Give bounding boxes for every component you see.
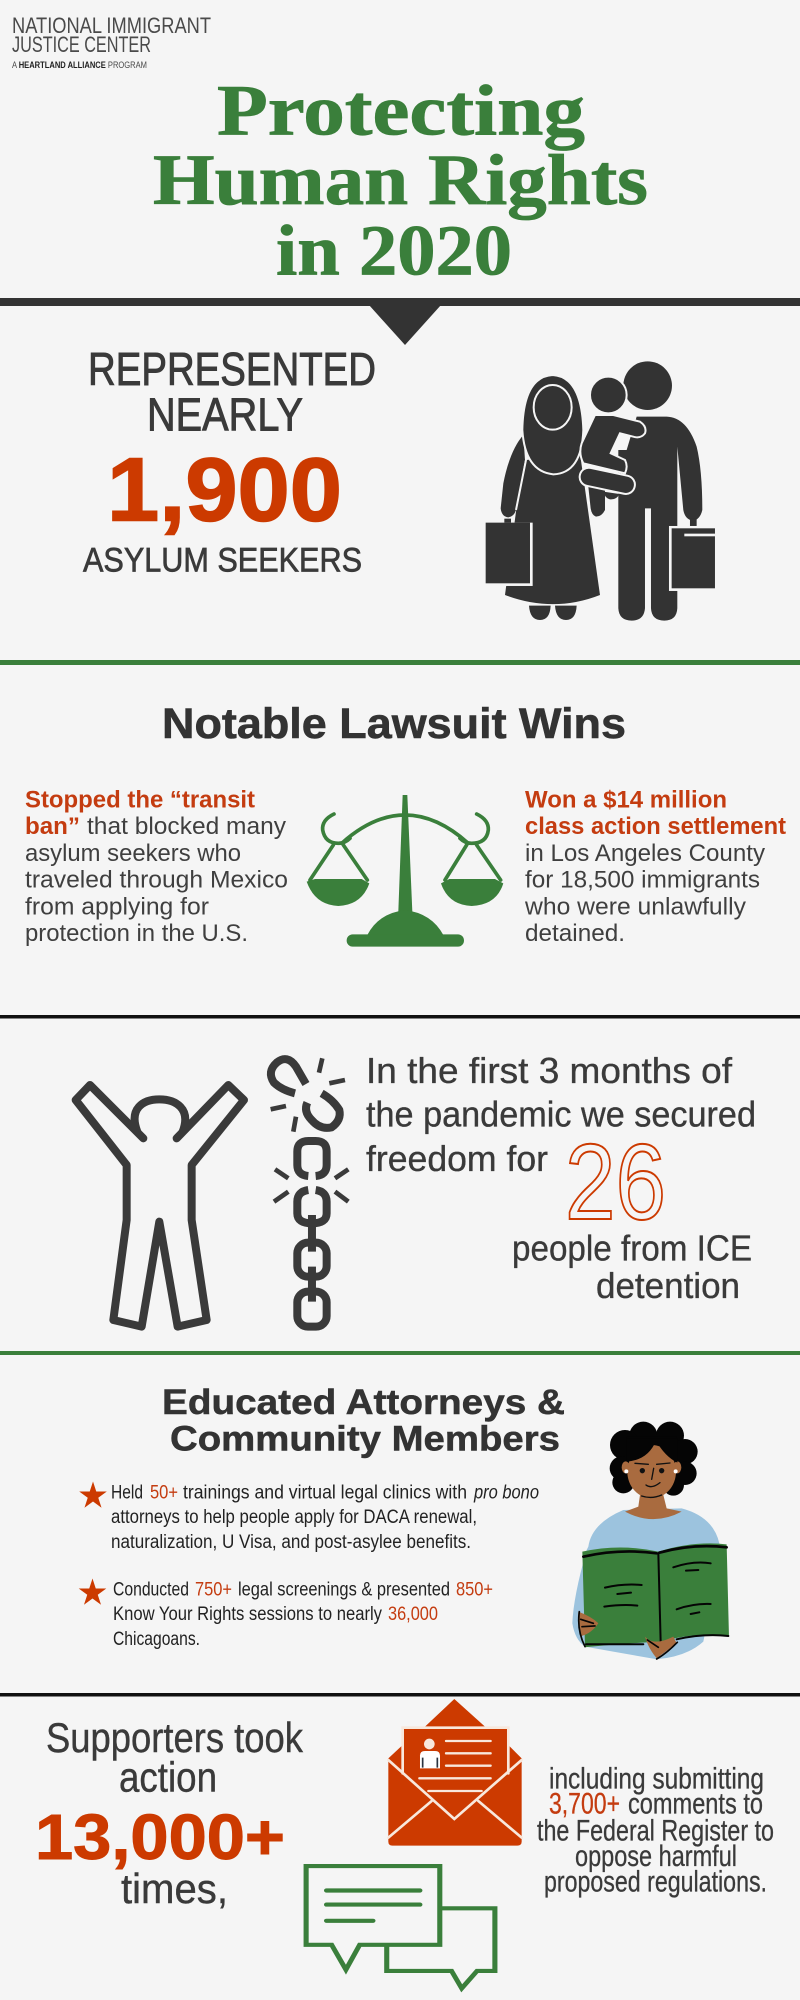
text block: class action settlement: detained. [525,920,625,947]
title: Human Rights [153,140,648,220]
text block: class action settlement: who were unlawfully [524,894,746,920]
icon: scales of justice [307,795,503,947]
text block: transit ban: Stopped the “transit [25,786,255,813]
stat text: 1,900 asylum seekers: 1,900 [107,441,342,541]
green divider [0,660,800,665]
icon: refugee family with bags [486,361,716,621]
text block: class action settlement [524,786,786,947]
icon: star bullet [79,1578,106,1605]
text block: federal register comments: comments to [628,1787,763,1820]
heading: educated attorneys and community members: Educated Attorneys & [162,1383,565,1422]
text block: federal register comments: oppose harmful [575,1840,737,1873]
logo: National Immigrant Justice Center: JUSTICE CENTER [12,32,151,57]
title: in 2020 [276,210,512,290]
text block: transit ban: that blocked many [87,813,286,840]
bullet: trainings: 50+ [150,1482,178,1503]
heading: educated attorneys and community members [162,1383,565,1459]
panel: educated attorneys and community [79,1383,729,1659]
icon: person with raised arms [76,1085,244,1327]
illustration: woman reading a book [572,1422,729,1659]
black divider [0,1693,800,1696]
text block: transit ban: traveled through Mexico [25,867,288,894]
text block: federal register comments [537,1762,774,1899]
text block: transit ban: from applying for [25,894,209,920]
bullet: trainings: pro bono [473,1482,539,1503]
stat text: freedom for 26 people [366,1050,756,1306]
stat text: freedom for 26 people: people from ICE [512,1227,752,1268]
stat text: 1,900 asylum seekers [83,343,376,580]
bullet: trainings: Held [111,1482,143,1503]
panel: ICE detention release [76,1050,756,1327]
icon: star bullet [79,1482,107,1508]
title [153,71,648,290]
logo: National Immigrant Justice Center [12,13,211,71]
bullet: trainings [79,1482,539,1553]
text block: transit ban: ban” [25,813,80,840]
panel: notable lawsuit wins [25,700,786,947]
stat text: 13,000+ actions [35,1714,304,1912]
logo: National Immigrant Justice Center: A HEARTLAND ALLIANCE PROGRAM [12,60,147,71]
logo: National Immigrant Justice Center: NATIONAL IMMIGRANT [12,13,211,38]
bullet: legal screenings: Conducted [113,1579,189,1600]
bullet: legal screenings [79,1578,493,1650]
text block: transit ban: protection in the U.S. [25,920,248,947]
stat text: 1,900 asylum seekers: ASYLUM SEEKERS [83,542,362,580]
green divider [0,1351,800,1355]
bullet: legal screenings: legal screenings & presented [238,1579,450,1600]
panel: supporters took action [35,1699,774,1988]
stat text: freedom for 26 people: detention [596,1265,740,1306]
bullet: legal screenings: 36,000 [388,1604,438,1625]
bullet: legal screenings: Chicagoans. [113,1629,200,1650]
bullet: legal screenings: 750+ [195,1579,232,1600]
bullet: trainings: attorneys to help people apply for DACA renewal, [111,1507,477,1528]
heading: educated attorneys and community members: Community Members [170,1420,560,1459]
text block: class action settlement: Won a $14 million [525,786,727,813]
black divider [0,1015,800,1018]
icon: broken chain [271,1058,348,1327]
icon: open envelope with letter [388,1699,522,1846]
bullet: legal screenings: Know Your Rights sessions to nearly [113,1604,382,1625]
stat text: freedom for 26 people: freedom for [366,1138,548,1179]
text block: class action settlement: class action settlement [525,813,786,840]
icon: speech bubbles [306,1866,495,1988]
stat text: 13,000+ actions: Supporters took [46,1714,304,1761]
text block: transit ban: asylum seekers who [25,840,241,867]
stat text: 1,900 asylum seekers: NEARLY [147,389,303,441]
stat text: 13,000+ actions: action [119,1754,217,1800]
stat text: freedom for 26 people: 26 [565,1121,666,1242]
bullet: legal screenings: 850+ [456,1579,493,1600]
text block: transit ban [25,786,288,947]
panel: asylum seekers [83,343,716,621]
text block: federal register comments: 3,700+ [549,1787,620,1820]
bullet: trainings: trainings and virtual legal clinics with [183,1482,467,1503]
stat text: freedom for 26 people: the pandemic we secured [366,1094,756,1134]
heading: notable lawsuit wins: Notable Lawsuit Wins [162,700,626,748]
text block: class action settlement: in Los Angeles County [525,840,765,867]
title: Protecting [217,71,585,151]
header divider with pointer [0,298,800,345]
text block: class action settlement: for 18,500 immigrants [525,867,760,894]
bullet: trainings: naturalization, U Visa, and post-asylee benefits. [111,1532,471,1553]
stat text: 13,000+ actions: times, [121,1865,228,1912]
stat text: 1,900 asylum seekers: REPRESENTED [88,343,376,395]
stat text: 13,000+ actions: 13,000+ [35,1801,285,1873]
stat text: freedom for 26 people: In the first 3 months of [366,1050,733,1091]
